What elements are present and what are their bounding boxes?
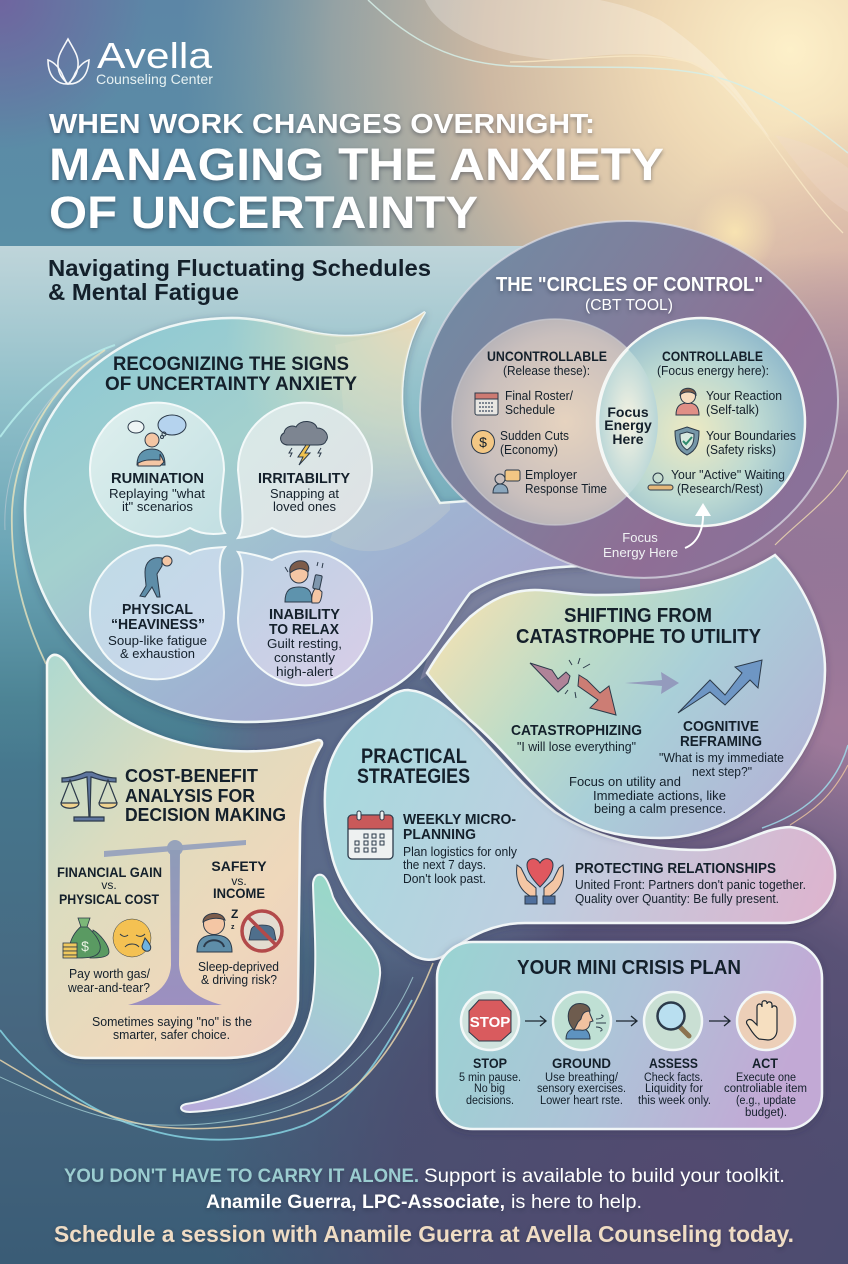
heading: OF UNCERTAINTY ANXIETY [105,374,357,395]
circle: controllable: Your "Active" Waiting [671,467,785,482]
circle: uncontrollable: (Economy) [500,442,558,457]
footer: is here to help. [511,1192,642,1213]
step: assess: this week only. [638,1095,711,1107]
overlap: focus energy here: Energy [604,417,652,433]
title: MANAGING THE ANXIETY [49,139,664,190]
panel: shifting from catastrophe to utility [427,555,825,838]
text: protecting relationships: PROTECTING RELATIONSHIPS [575,860,776,877]
icon: resting person [648,473,673,490]
bubble: inability to relax: high-alert [276,664,333,679]
title: OF UNCERTAINTY [49,187,478,238]
footer: YOU DON'T HAVE TO CARRY IT ALONE. [64,1166,419,1187]
text: cognitive reframing: REFRAMING [680,733,762,750]
step: stop [459,992,521,1107]
icon: thinking person [128,415,186,466]
circle: uncontrollable: Sudden Cuts [500,428,569,443]
text: safety vs income [211,858,267,901]
text: weekly micro-planning [403,811,517,886]
icon: person with message [493,470,520,493]
icon: dollar coin: $ [479,434,487,450]
heading: SHIFTING FROM [564,605,712,627]
heading [125,766,286,825]
footer: Support is available to build your toolkit. [424,1166,785,1187]
icon: shield [675,427,699,455]
callout: focus energy here: Focus [622,530,658,545]
step: stop: No big [474,1083,505,1095]
text: safety vs income: vs. [231,874,247,888]
step: act: controliable item [724,1083,807,1095]
text: saying no: smarter, safer choice. [113,1027,230,1042]
text: pay worth: wear-and-tear? [67,980,150,995]
text: weekly micro-planning: WEEKLY MICRO- [403,811,516,828]
circle: uncontrollable: Employer [525,467,578,482]
icon: stop sign: STOP [470,1014,510,1031]
bubble: inability to relax [238,551,372,685]
circle: controllable: Your Reaction [706,388,782,403]
text: safety vs income: INCOME [213,885,265,901]
text: protecting relationships: Quality over Quantity: Be fully present. [575,891,779,906]
arrow [525,1016,546,1026]
bubble: inability to relax: INABILITY [269,606,340,623]
step: ground: Use breathing/ [545,1072,619,1084]
bubble: physical heaviness: Soup-like fatigue [108,633,207,648]
icon: broken downward arrow [530,658,616,715]
text: focus on utility: being a calm presence. [594,801,726,816]
bubble: inability to relax: constantly [274,650,336,665]
text: cognitive reframing [659,718,784,779]
icon: magnifying glass [658,1002,689,1036]
step: act: budget). [745,1107,787,1119]
text: pay worth: Pay worth gas/ [69,966,150,981]
text: cognitive reframing: COGNITIVE [683,718,759,735]
heading: RECOGNIZING THE SIGNS [113,354,349,375]
heading: YOUR MINI CRISIS PLAN [517,957,741,979]
callout: focus energy here [603,503,711,560]
subtitle: Navigating Fluctuating Schedules [48,255,431,281]
text: focus on utility [569,774,726,816]
circle: controllable [597,318,805,526]
circle: controllable: CONTROLLABLE [662,348,763,364]
bubble: irritability: Snapping at [270,486,339,501]
circle: controllable: (Self-talk) [706,402,759,417]
step: ground [537,992,626,1107]
subtitle: & Mental Fatigue [48,279,239,305]
heading: (CBT TOOL) [585,297,673,314]
text: cognitive reframing: "What is my immediate [659,750,784,765]
heading [496,274,763,314]
brand tagline: Counseling Center [96,71,213,87]
icon: scales [61,772,117,821]
text: financial gain vs physical cost: PHYSICAL COST [59,891,159,907]
text: weekly micro-planning: the next 7 days. [403,857,486,872]
icon: person with phone [285,561,323,603]
text: cognitive reframing: next step?" [692,764,752,779]
icon: calendar [348,811,393,859]
step: act: (e.g., update [736,1095,796,1107]
heading [516,605,762,648]
arrow [709,1016,730,1026]
circle: controllable: (Safety risks) [706,442,776,457]
heading [357,745,470,788]
text: protecting relationships: United Front: Partners don't panic together. [575,877,806,892]
text: weekly micro-planning: PLANNING [403,826,476,843]
bubble: rumination [90,403,225,537]
heading: CATASTROPHE TO UTILITY [516,626,762,648]
icon: sleepy driver: z [231,924,235,931]
balance beam [104,840,246,1005]
step: stop: 5 min pause. [459,1072,521,1084]
text: sleep-deprived [198,959,279,987]
text: focus on utility: Focus on utility and [569,774,681,789]
heading [105,354,357,395]
logo [48,35,213,87]
brand name: Avella [97,35,213,76]
callout: focus energy here: Energy Here [603,545,678,560]
panel: circles of control [420,221,838,578]
circle: uncontrollable: Response Time [525,481,607,496]
icon: calm person [676,388,699,415]
circle: uncontrollable: Final Roster/ [505,388,573,403]
text: financial gain vs physical cost: vs. [101,878,117,892]
icon: hands and heart [517,859,563,904]
title: WHEN WORK CHANGES OVERNIGHT: [49,108,595,139]
bubble: rumination: RUMINATION [111,470,204,487]
bubble: irritability: loved ones [273,499,336,514]
arrow: shift [625,672,679,694]
text: protecting relationships [575,860,806,906]
bubble: physical heaviness [90,545,225,679]
footer [54,1166,794,1247]
step: stop: STOP [473,1055,507,1071]
step: ground: Lower heart rste. [540,1095,623,1107]
panel: practical strategies [325,690,835,960]
text: weekly micro-planning: Plan logistics for only [403,844,517,859]
icon: sad face [113,919,151,957]
text: safety vs income: SAFETY [211,858,267,874]
bubble: irritability: IRRITABILITY [258,470,350,487]
heading: STRATEGIES [357,765,470,788]
text: pay worth [67,966,150,995]
text: weekly micro-planning: Don't look past. [403,871,486,886]
text: sleep-deprived: Sleep-deprived [198,959,279,974]
icon: no driving [242,911,282,951]
bubble: physical heaviness: & exhaustion [120,646,195,661]
icon: sleepy driver: Z [231,907,238,921]
text: focus on utility: Immediate actions, like [593,788,726,803]
icon: money bags [63,918,109,958]
bubble: physical heaviness: PHYSICAL [122,601,193,618]
icon: sleepy driver [197,907,238,952]
text: sleep-deprived: & driving risk? [201,972,277,987]
step: act: ACT [752,1055,778,1071]
step: ground: GROUND [552,1055,611,1071]
heading: COST-BENEFIT [125,766,258,786]
heading: DECISION MAKING [125,805,286,825]
text: catastrophizing [511,722,642,754]
circle: uncontrollable: Schedule [505,402,555,417]
circle: controllable: (Focus energy here): [657,363,769,378]
icon: rising arrow [678,660,762,713]
bubble: physical heaviness: “HEAVINESS” [111,616,205,633]
step: assess [638,992,711,1107]
step: act [724,992,807,1119]
icon: money bags: $ [81,938,89,954]
icon: breathing person [566,1003,606,1039]
bubble: rumination: Replaying "what [109,486,205,501]
step: ground: sensory exercises. [537,1083,626,1095]
arrow [685,503,711,548]
circle: controllable: (Research/Rest) [677,481,763,496]
overlap: focus energy here: Here [612,431,644,447]
text: financial gain vs physical cost [57,864,162,907]
icon: lotus [48,39,89,84]
title [49,108,664,238]
overlap: focus energy here: Focus [607,404,649,420]
icon: tired person [140,556,172,597]
footer: Anamile Guerra, LPC-Associate, [206,1192,505,1213]
step: assess: Check facts. [644,1072,703,1084]
icon: dollar coin [472,430,494,454]
overlap: focus energy here [598,349,658,495]
text: saying no: Sometimes saying "no" is the [92,1014,252,1029]
circle: uncontrollable: (Release these): [503,363,590,378]
text: financial gain vs physical cost: FINANCIAL GAIN [57,864,162,880]
text: saying no [92,1014,252,1042]
panel: your mini crisis plan [437,942,822,1129]
step: assess: ASSESS [649,1055,698,1071]
icon: storm cloud [281,421,327,465]
arrow [616,1016,637,1026]
panel: recognizing the signs [25,300,590,722]
icon: raised hand [747,1001,777,1040]
footer: Schedule a session with Anamile Guerra at Avella Counseling today. [54,1221,794,1247]
circle: uncontrollable [452,319,658,525]
text: catastrophizing: "I will lose everything" [517,739,636,754]
heading: ANALYSIS FOR [125,786,255,806]
circle: controllable: Your Boundaries [706,428,796,443]
step: act: Execute one [736,1072,796,1084]
subtitle [48,255,431,305]
circle: uncontrollable: UNCONTROLLABLE [487,348,607,364]
bubble: rumination: it" scenarios [122,499,193,514]
bubble: irritability [238,403,372,538]
step: stop: decisions. [466,1095,514,1107]
text: catastrophizing: CATASTROPHIZING [511,722,642,739]
bubble: inability to relax: TO RELAX [269,621,339,638]
heading: PRACTICAL [361,745,467,768]
bubble: inability to relax: Guilt resting, [267,636,342,651]
heading: THE "CIRCLES OF CONTROL" [496,274,763,296]
decorative tail [181,875,380,1112]
step: assess: Liquidity for [645,1083,703,1095]
icon: calendar [475,393,498,415]
panel: cost-benefit analysis [47,655,322,1058]
